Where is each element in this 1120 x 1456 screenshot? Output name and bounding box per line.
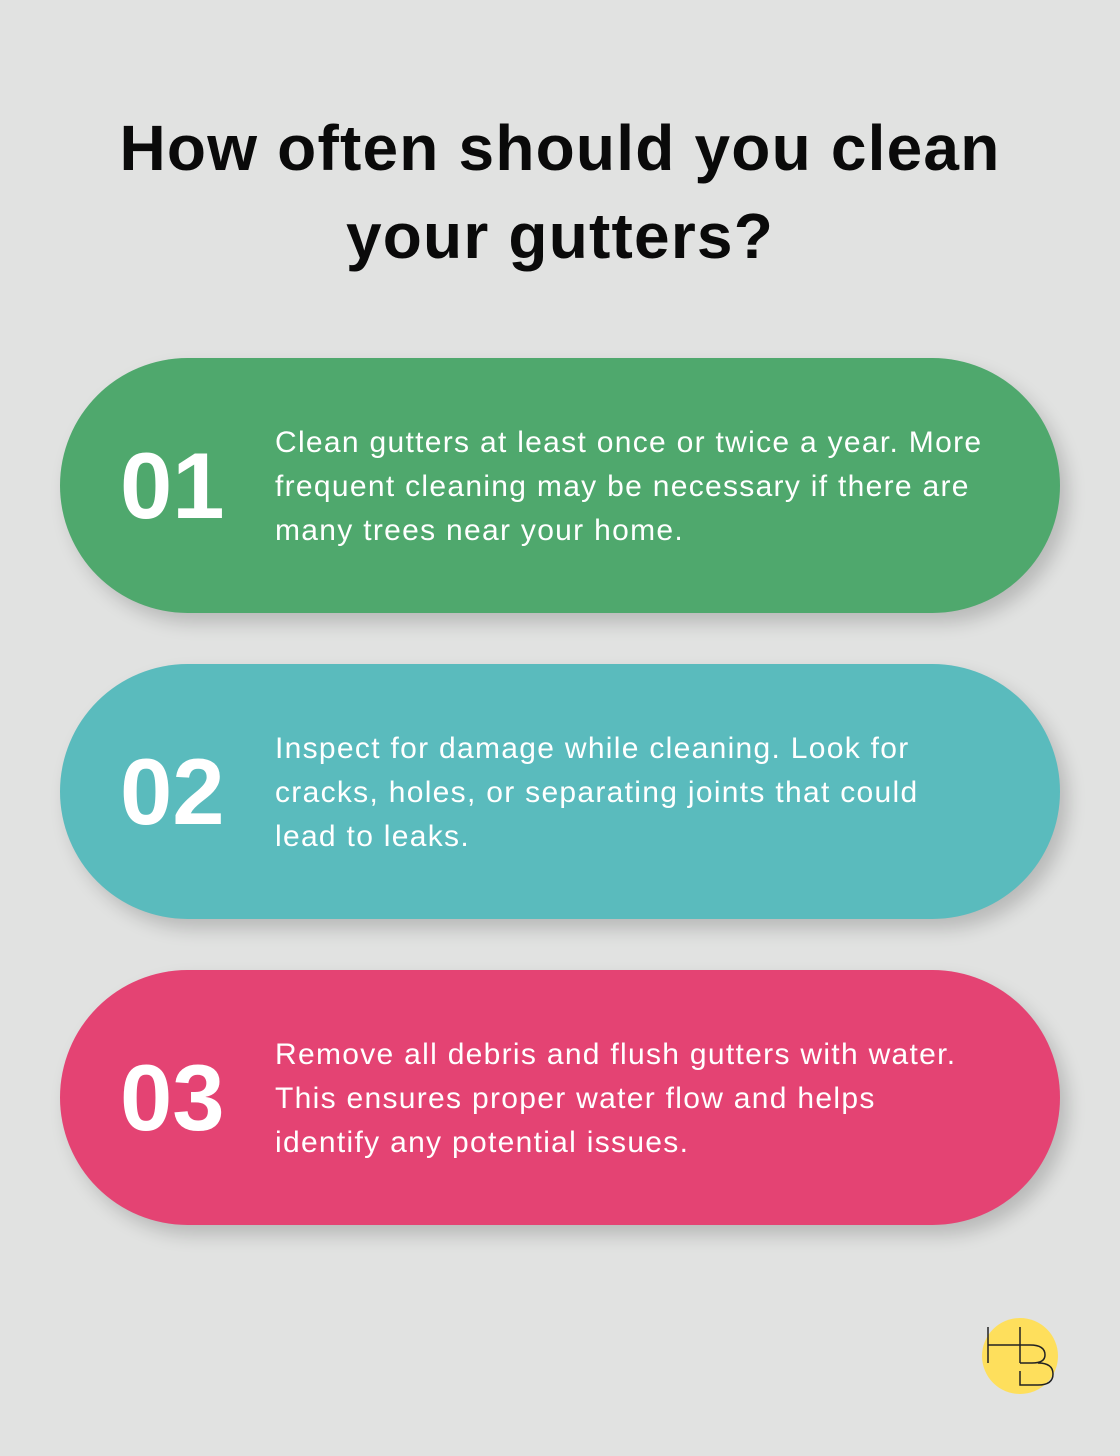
text 01: many trees near your home.: [275, 514, 684, 547]
text 01: Clean gutters at least once or twice a year. More: [275, 426, 982, 459]
number 02: 02: [120, 739, 225, 844]
title: How often should you clean: [119, 112, 1000, 184]
text 01: [275, 426, 982, 547]
panel: step 03: [60, 970, 1060, 1225]
text 03: This ensures proper water flow and helps: [275, 1082, 876, 1115]
number 03: 03: [120, 1045, 225, 1150]
panel: step 01: [60, 358, 1060, 613]
icon: logo: [982, 1318, 1058, 1394]
panel: step 02: [60, 664, 1060, 919]
text 03: identify any potential issues.: [275, 1126, 689, 1159]
text 03: [275, 1038, 956, 1159]
title: your gutters?: [346, 200, 774, 272]
text 02: lead to leaks.: [275, 820, 470, 853]
text 02: Inspect for damage while cleaning. Look for: [275, 732, 910, 765]
text 02: cracks, holes, or separating joints that could: [275, 776, 918, 809]
text 03: Remove all debris and flush gutters with water.: [275, 1038, 956, 1071]
number 01: 01: [120, 433, 225, 538]
text 02: [275, 732, 918, 853]
title: [119, 112, 1000, 272]
text 01: frequent cleaning may be necessary if there are: [275, 470, 970, 503]
